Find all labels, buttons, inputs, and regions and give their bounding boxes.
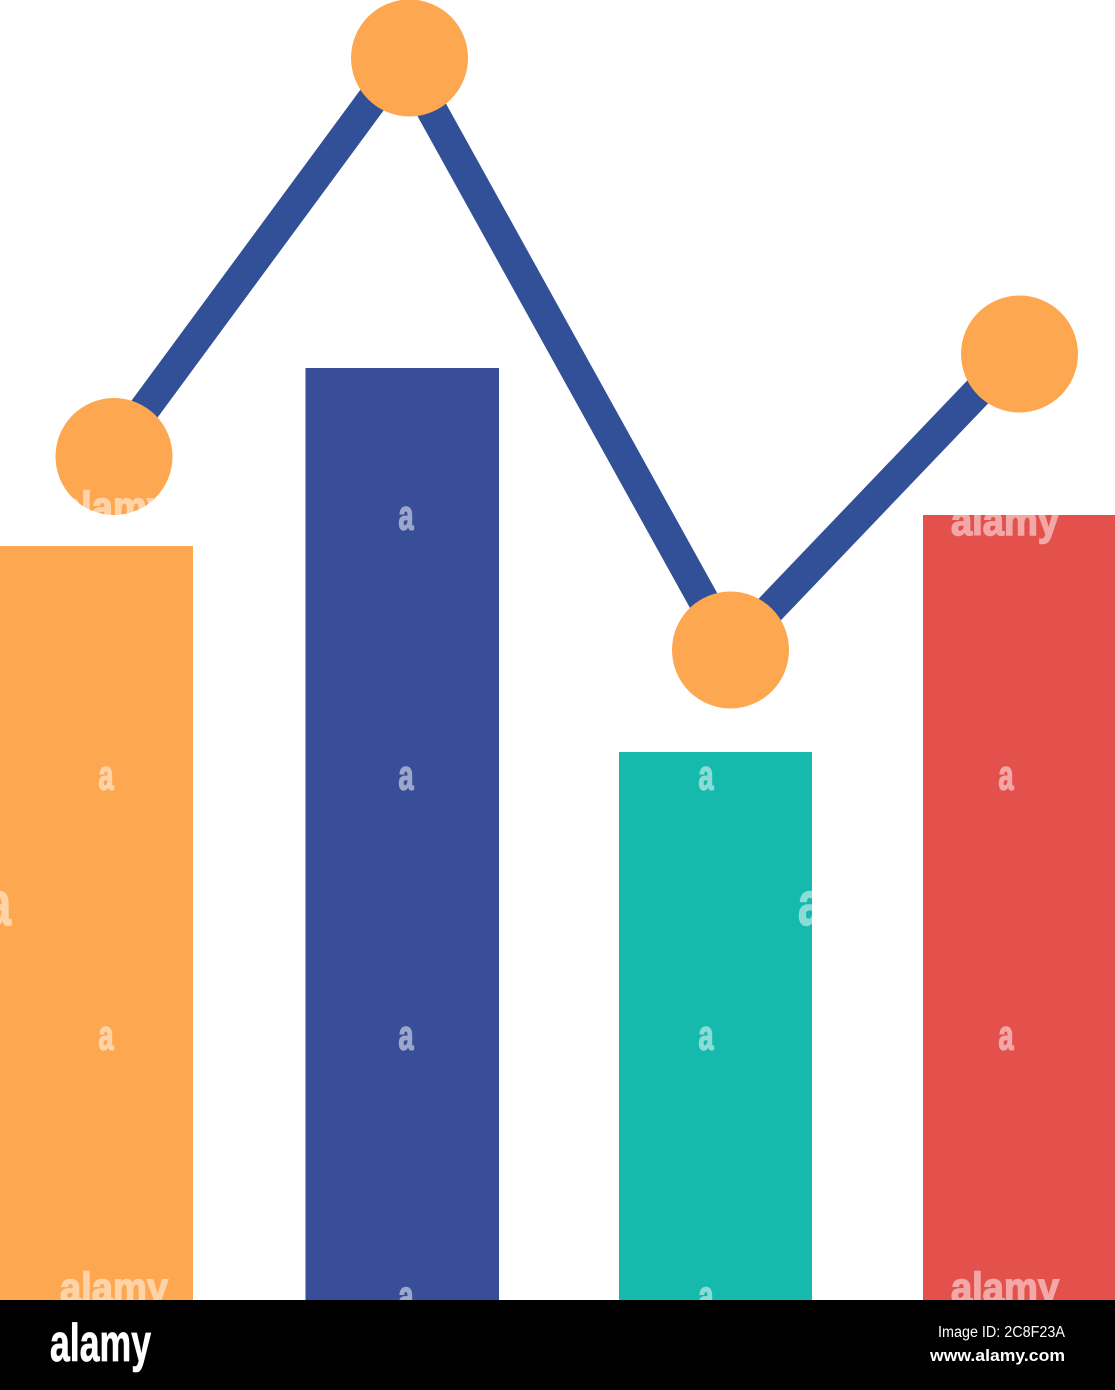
data point 3 — [672, 592, 789, 708]
watermarks: a — [98, 752, 114, 798]
watermarks: a — [398, 1272, 414, 1319]
watermarks: a — [698, 752, 714, 798]
line — [110, 58, 1014, 650]
watermarks: a — [398, 752, 414, 798]
line chart — [56, 0, 1078, 708]
watermarks — [0, 483, 1060, 1319]
data point 2 — [351, 0, 468, 116]
watermarks: a — [398, 1012, 414, 1058]
watermarks: alamy — [60, 1264, 169, 1311]
watermarks: a — [998, 1012, 1014, 1058]
data point 4 — [961, 296, 1078, 412]
watermarks: a — [798, 870, 822, 939]
logo text: alamy — [50, 1314, 151, 1373]
watermarks: a — [98, 1012, 114, 1058]
bar: blue — [306, 368, 499, 1300]
watermarks: a — [398, 492, 414, 538]
website: www.alamy.com — [929, 1347, 1065, 1365]
image id: Image ID: 2C8F23A — [938, 1324, 1066, 1341]
watermarks: a — [698, 1272, 714, 1319]
watermarks: a — [998, 752, 1014, 798]
bar chart — [0, 368, 1115, 1300]
watermarks: alamy — [951, 1264, 1060, 1311]
bar: orange — [0, 546, 193, 1300]
footer bar — [0, 1300, 1115, 1390]
bar: red — [923, 515, 1115, 1300]
data point 1 — [56, 398, 172, 515]
watermarks: alamy — [951, 497, 1060, 544]
watermarks: alamy — [60, 483, 169, 530]
bar: teal — [619, 752, 812, 1300]
watermarks: a — [698, 1012, 714, 1058]
